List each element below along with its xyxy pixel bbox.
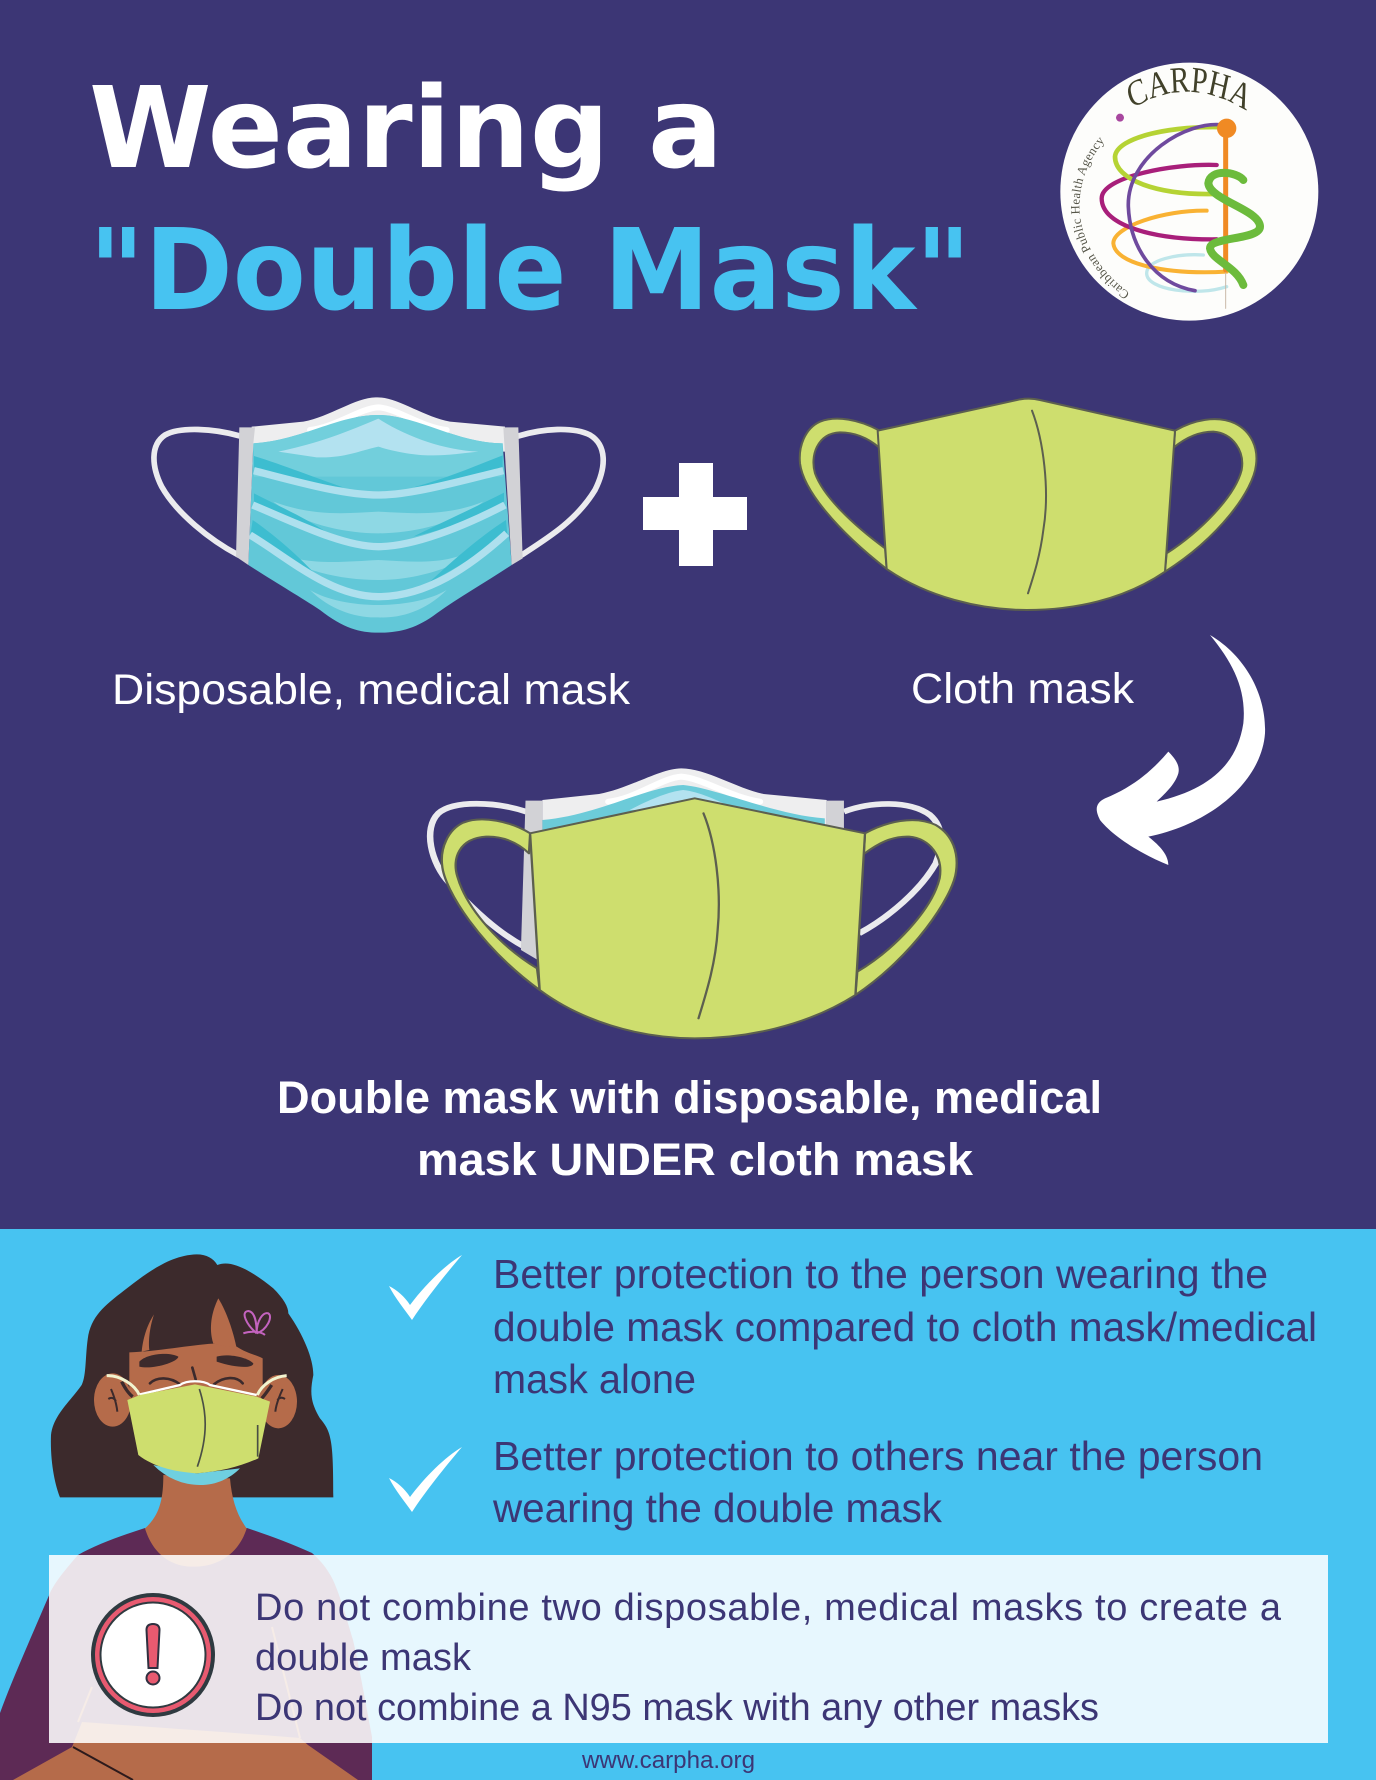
text: warning: double mask: [255, 1637, 472, 1679]
text: second benefit: Better protection to others near the person: [493, 1433, 1263, 1479]
text: second benefit: [492, 1433, 1263, 1531]
text: first benefit: Better protection to the person wearing the: [493, 1251, 1268, 1297]
text: warning: Do not combine a N95 mask with any other masks: [255, 1687, 1099, 1729]
icon: cloth mask: [800, 399, 1256, 610]
icon: check mark one: [389, 1255, 462, 1320]
title: [89, 64, 971, 336]
text: warning: Do not combine two disposable, medical masks to create a: [255, 1587, 1282, 1629]
title: Wearing a: [89, 64, 723, 194]
text: second benefit: wearing the double mask: [492, 1485, 942, 1531]
text: first benefit: double mask compared to cloth mask/medical: [493, 1304, 1317, 1350]
title: "Double Mask": [89, 206, 971, 336]
text: first benefit: [493, 1251, 1317, 1402]
icon: check mark two: [389, 1447, 462, 1512]
logo: CARPHA: [1060, 62, 1318, 321]
label: disposable medical mask: Disposable, medical mask: [112, 666, 631, 714]
icon: plus sign: [643, 463, 747, 566]
illustration: woman wearing double mask: [0, 1254, 372, 1780]
text: first benefit: mask alone: [493, 1356, 696, 1402]
logo: CARPHA: Caribbean Public Health Agency: [1071, 137, 1128, 298]
panel: warning box: [49, 1555, 1328, 1743]
panel: bottom blue background: [0, 1229, 1376, 1780]
footer: website: www.carpha.org: [581, 1747, 755, 1774]
icon: double mask combination: [430, 768, 957, 1038]
arrow: curved white arrow: [1097, 635, 1265, 865]
icon: warning exclamation: [91, 1593, 215, 1717]
heading: double mask instruction: Double mask with disposable, medical: [277, 1072, 1102, 1123]
label: cloth mask: Cloth mask: [911, 665, 1135, 713]
icon: disposable medical mask: [154, 397, 603, 633]
panel: top navy background: [0, 0, 1376, 1230]
heading: double mask instruction: [277, 1072, 1102, 1185]
heading: double mask instruction: mask UNDER cloth mask: [417, 1134, 974, 1185]
logo: CARPHA: CARPHA: [1128, 68, 1247, 110]
text: warning: [255, 1587, 1282, 1729]
